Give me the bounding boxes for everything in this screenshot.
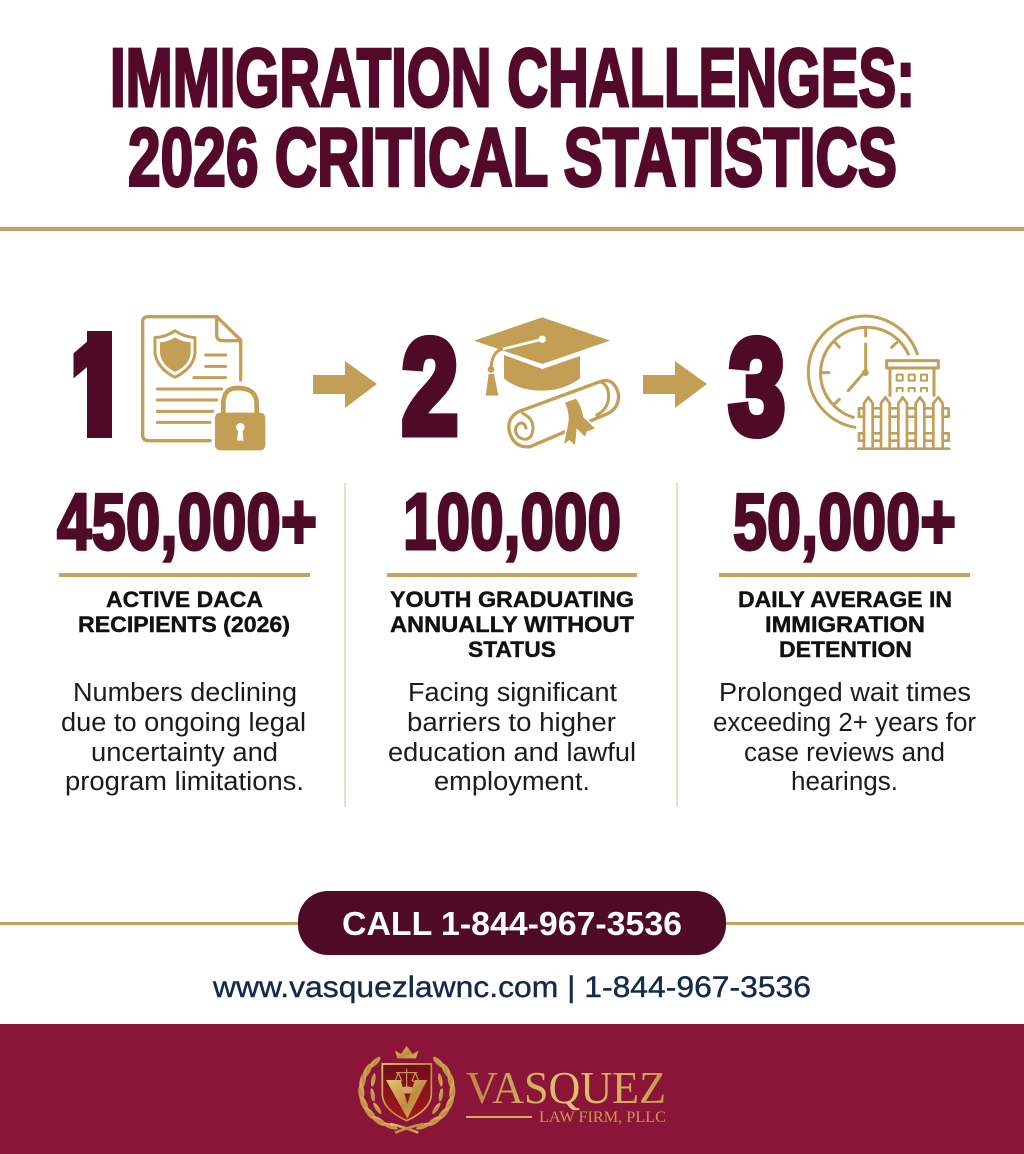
description [61,679,306,796]
number 1 [74,331,112,438]
description: exceeding 2+ years for [713,709,977,737]
heading: DAILY AVERAGE IN [738,587,952,612]
description: due to ongoing legal [61,709,306,737]
left branch [358,1055,398,1131]
call button [298,891,726,955]
scales [395,1069,419,1088]
logo wordmark: LAW FIRM, PLLC [539,1109,666,1126]
contact line: www.vasquezlawnc.com | 1-844-967-3536 [212,971,811,1004]
wreath [358,1055,456,1133]
heading: IMMIGRATION [765,612,925,637]
icon: document with shield and lock [143,317,265,450]
heading: YOUTH GRADUATING [390,587,634,612]
heading [738,587,952,662]
description [388,679,636,796]
description: education and lawful [388,739,636,767]
number 1: 1 [70,313,126,462]
icon: clock and detention building [808,316,949,449]
heading: RECIPIENTS (2026) [78,612,290,637]
arrow 1 [313,361,377,408]
description: program limitations. [65,768,304,796]
description: barriers to higher [407,709,617,737]
big number: 50,000+ [733,477,956,566]
title [110,31,915,204]
number 3: 3 [729,313,785,462]
heading: ACTIVE DACA [106,587,263,612]
shield [382,1064,431,1121]
right branch [415,1055,456,1131]
description: uncertainty and [91,739,278,767]
panel: youth graduating [387,313,637,796]
logo wordmark: VASQUEZ [466,1062,666,1113]
description: Numbers declining [73,679,297,707]
heading: DETENTION [779,637,912,662]
heading [78,587,290,637]
number 2: 2 [402,313,458,462]
panel: DACA recipients [57,313,317,796]
panel: immigration detention [713,313,977,796]
crown [395,1046,419,1058]
footer band [0,1024,1024,1154]
description: Facing significant [408,679,617,707]
description: employment. [434,768,590,796]
heading [390,587,635,662]
big number: 450,000+ [57,477,317,566]
big number: 100,000 [403,477,621,566]
description [713,679,977,796]
description: hearings. [791,768,898,796]
logo emblem [358,1046,456,1133]
letter V [386,1080,427,1118]
description: Prolonged wait times [719,679,971,707]
heading: ANNUALLY WITHOUT [390,612,635,637]
arrow 2 [643,361,707,408]
icon: graduation cap and diploma [474,317,619,447]
call button: CALL 1-844-967-3536 [342,905,682,942]
heading: STATUS [468,637,556,662]
description: case reviews and [744,739,945,767]
